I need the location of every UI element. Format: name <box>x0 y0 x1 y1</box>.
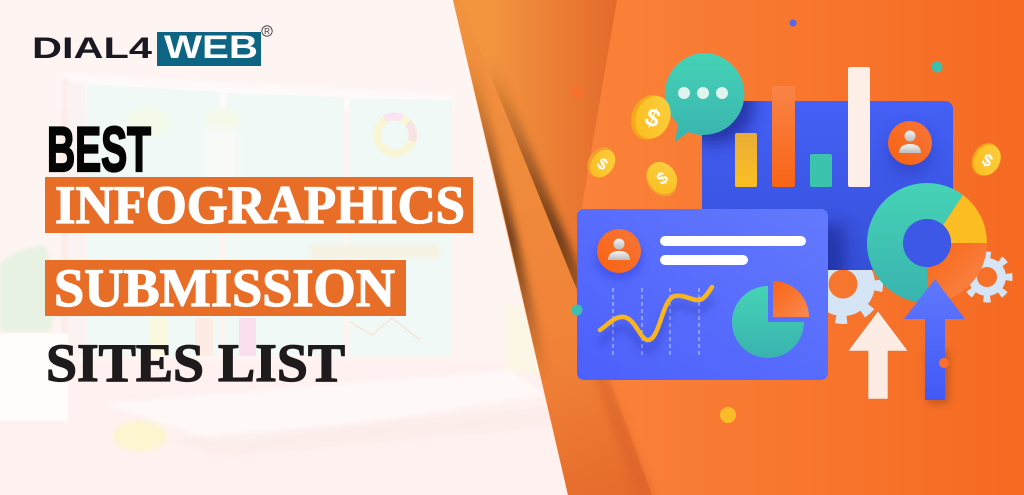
title: SITES LIST: SITES LIST <box>46 333 345 393</box>
coin: small centre <box>640 156 684 202</box>
coin: right: $ <box>979 150 996 172</box>
title band: INFOGRAPHICS: INFOGRAPHICS <box>55 175 465 235</box>
logo wordmark DIAL4: DIAL4 <box>32 32 152 65</box>
decorative dots <box>572 20 942 423</box>
coin: small centre: $ <box>653 168 672 189</box>
fold: long strip <box>453 0 652 495</box>
faded office scene background <box>0 74 570 495</box>
donut chart <box>867 183 987 303</box>
coin: large: $ <box>641 103 664 134</box>
logo: DIAL4WEB <box>32 26 272 66</box>
bubble dots <box>678 87 728 99</box>
orange dot on arrow <box>939 358 949 368</box>
gear: large <box>804 245 882 323</box>
coin: right <box>966 138 1006 181</box>
coin: small left: $ <box>593 155 611 174</box>
registered mark: R <box>264 27 270 36</box>
teal dot on panel edge <box>572 304 582 316</box>
line chart <box>600 287 712 358</box>
arrow: blue <box>904 279 965 404</box>
back dashboard panel <box>702 67 953 270</box>
title band: SUBMISSION: SUBMISSION <box>54 258 395 318</box>
gear: small <box>962 252 1012 302</box>
pie chart <box>732 281 809 358</box>
logo badge WEB <box>157 29 261 66</box>
registered mark <box>262 26 272 36</box>
front dashboard panel <box>577 209 828 380</box>
text placeholder lines <box>660 236 806 265</box>
coin: large <box>624 89 677 146</box>
fold: upper panel <box>460 0 617 290</box>
fold shadows <box>470 72 652 492</box>
speech bubble <box>665 53 744 142</box>
arrow: white <box>848 311 908 399</box>
coin: small left <box>582 142 621 183</box>
panel shadows <box>702 101 936 270</box>
logo badge WEB: WEB <box>164 29 258 65</box>
avatar badge <box>888 121 932 165</box>
bar chart <box>735 67 870 187</box>
orange right background <box>453 0 1024 495</box>
title: BEST: BEST <box>47 115 151 185</box>
avatar badge <box>595 229 643 280</box>
